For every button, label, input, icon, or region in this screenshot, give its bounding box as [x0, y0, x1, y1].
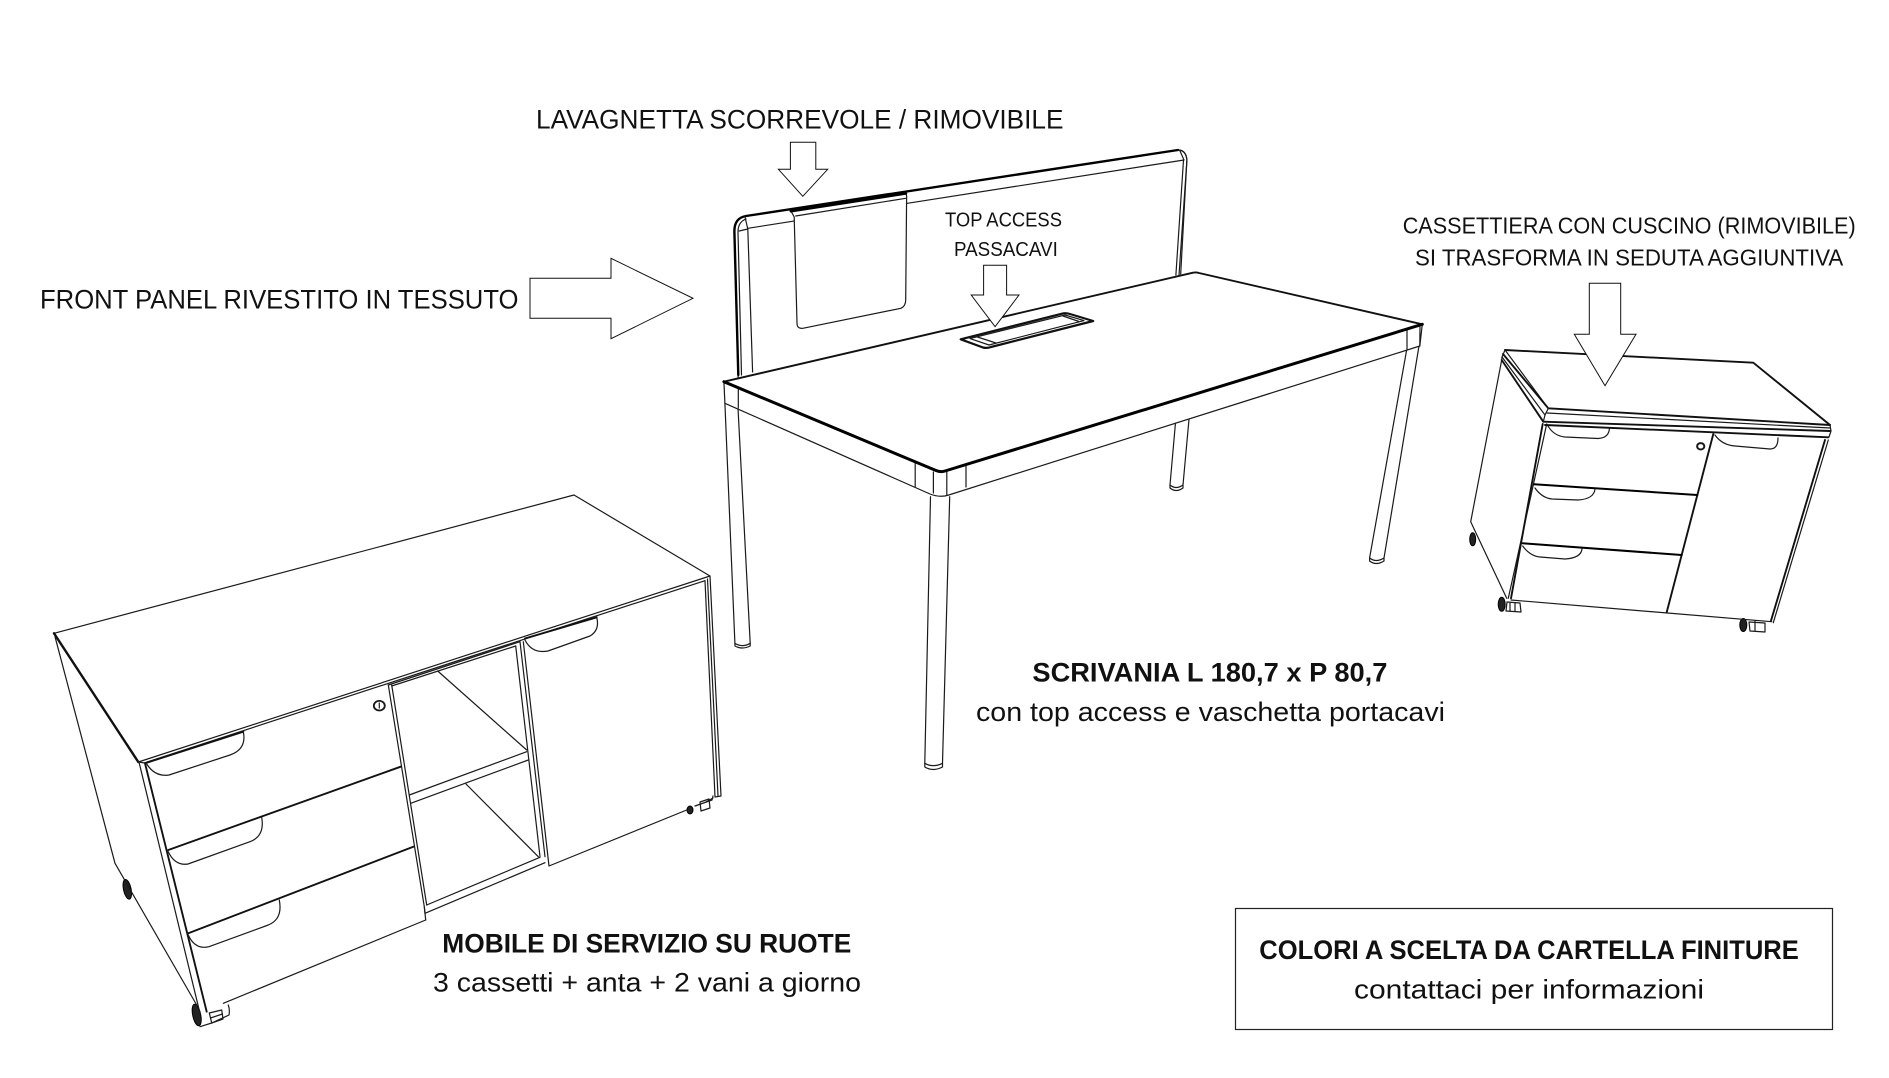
illustration: service cabinet on wheels — [54, 495, 721, 1027]
fabric front panel screen — [734, 150, 1187, 385]
cabinet wheels — [122, 796, 713, 1027]
illustration: drawer unit with cushion — [1470, 350, 1831, 632]
drawer lock — [374, 701, 385, 710]
cushion — [1502, 350, 1831, 437]
desk back leg — [1170, 416, 1189, 490]
drawer unit handles — [1523, 426, 1778, 559]
caption: scrivania: SCRIVANIA L 180,7 x P 80,7 — [1032, 658, 1387, 688]
callout: colori a scelta: contattaci per informazioni — [1354, 974, 1704, 1004]
arrow: lavagnetta — [778, 142, 828, 196]
drawer unit dividers — [1523, 484, 1697, 555]
label: cassettiera — [1403, 212, 1856, 270]
label: cassettiera: SI TRASFORMA IN SEDUTA AGGIUNTIVA — [1415, 244, 1844, 270]
label: top access passacavi — [945, 210, 1062, 261]
right front leg — [1370, 346, 1419, 564]
desk apron — [724, 324, 1422, 496]
drawer unit lock — [1697, 443, 1704, 449]
arrow: front panel — [530, 258, 693, 339]
sliding removable blackboard — [791, 193, 907, 328]
label: lavagnetta: LAVAGNETTA SCORREVOLE / RIMOVIBILE — [536, 104, 1064, 134]
caption: mobile di servizio — [433, 928, 861, 998]
cable grommet top access — [961, 313, 1093, 348]
door — [523, 576, 721, 866]
callout: colori a scelta: COLORI A SCELTA DA CARTELLA FINITURE — [1259, 935, 1799, 965]
illustration: desk with fabric screen — [724, 150, 1422, 770]
drawer unit body — [1471, 360, 1828, 623]
label: top access passacavi: TOP ACCESS — [945, 210, 1062, 232]
caption: mobile di servizio: 3 cassetti + anta + 2 vani a giorno — [433, 968, 861, 998]
open compartments and shelf — [388, 642, 545, 913]
label: top access passacavi: PASSACAVI — [954, 239, 1058, 261]
desk top — [724, 272, 1422, 472]
label: cassettiera: CASSETTIERA CON CUSCINO (RIMOVIBILE) — [1403, 212, 1856, 238]
arrow: cassettiera — [1574, 283, 1636, 386]
arrow: top access — [971, 265, 1019, 327]
drawer handles — [147, 732, 280, 947]
front centre leg — [925, 497, 950, 770]
callout: colori a scelta — [1236, 908, 1832, 1030]
caption: scrivania — [976, 658, 1445, 727]
label: front panel: FRONT PANEL RIVESTITO IN TESSUTO — [40, 285, 518, 315]
drawer dividers — [147, 732, 413, 933]
caption: mobile di servizio: MOBILE DI SERVIZIO SU RUOTE — [442, 928, 851, 958]
drawer front and body — [139, 685, 427, 1013]
caption: scrivania: con top access e vaschetta portacavi — [976, 697, 1445, 727]
front left leg — [725, 403, 750, 648]
cabinet top and side — [54, 495, 710, 1005]
drawer unit wheels — [1470, 533, 1765, 632]
